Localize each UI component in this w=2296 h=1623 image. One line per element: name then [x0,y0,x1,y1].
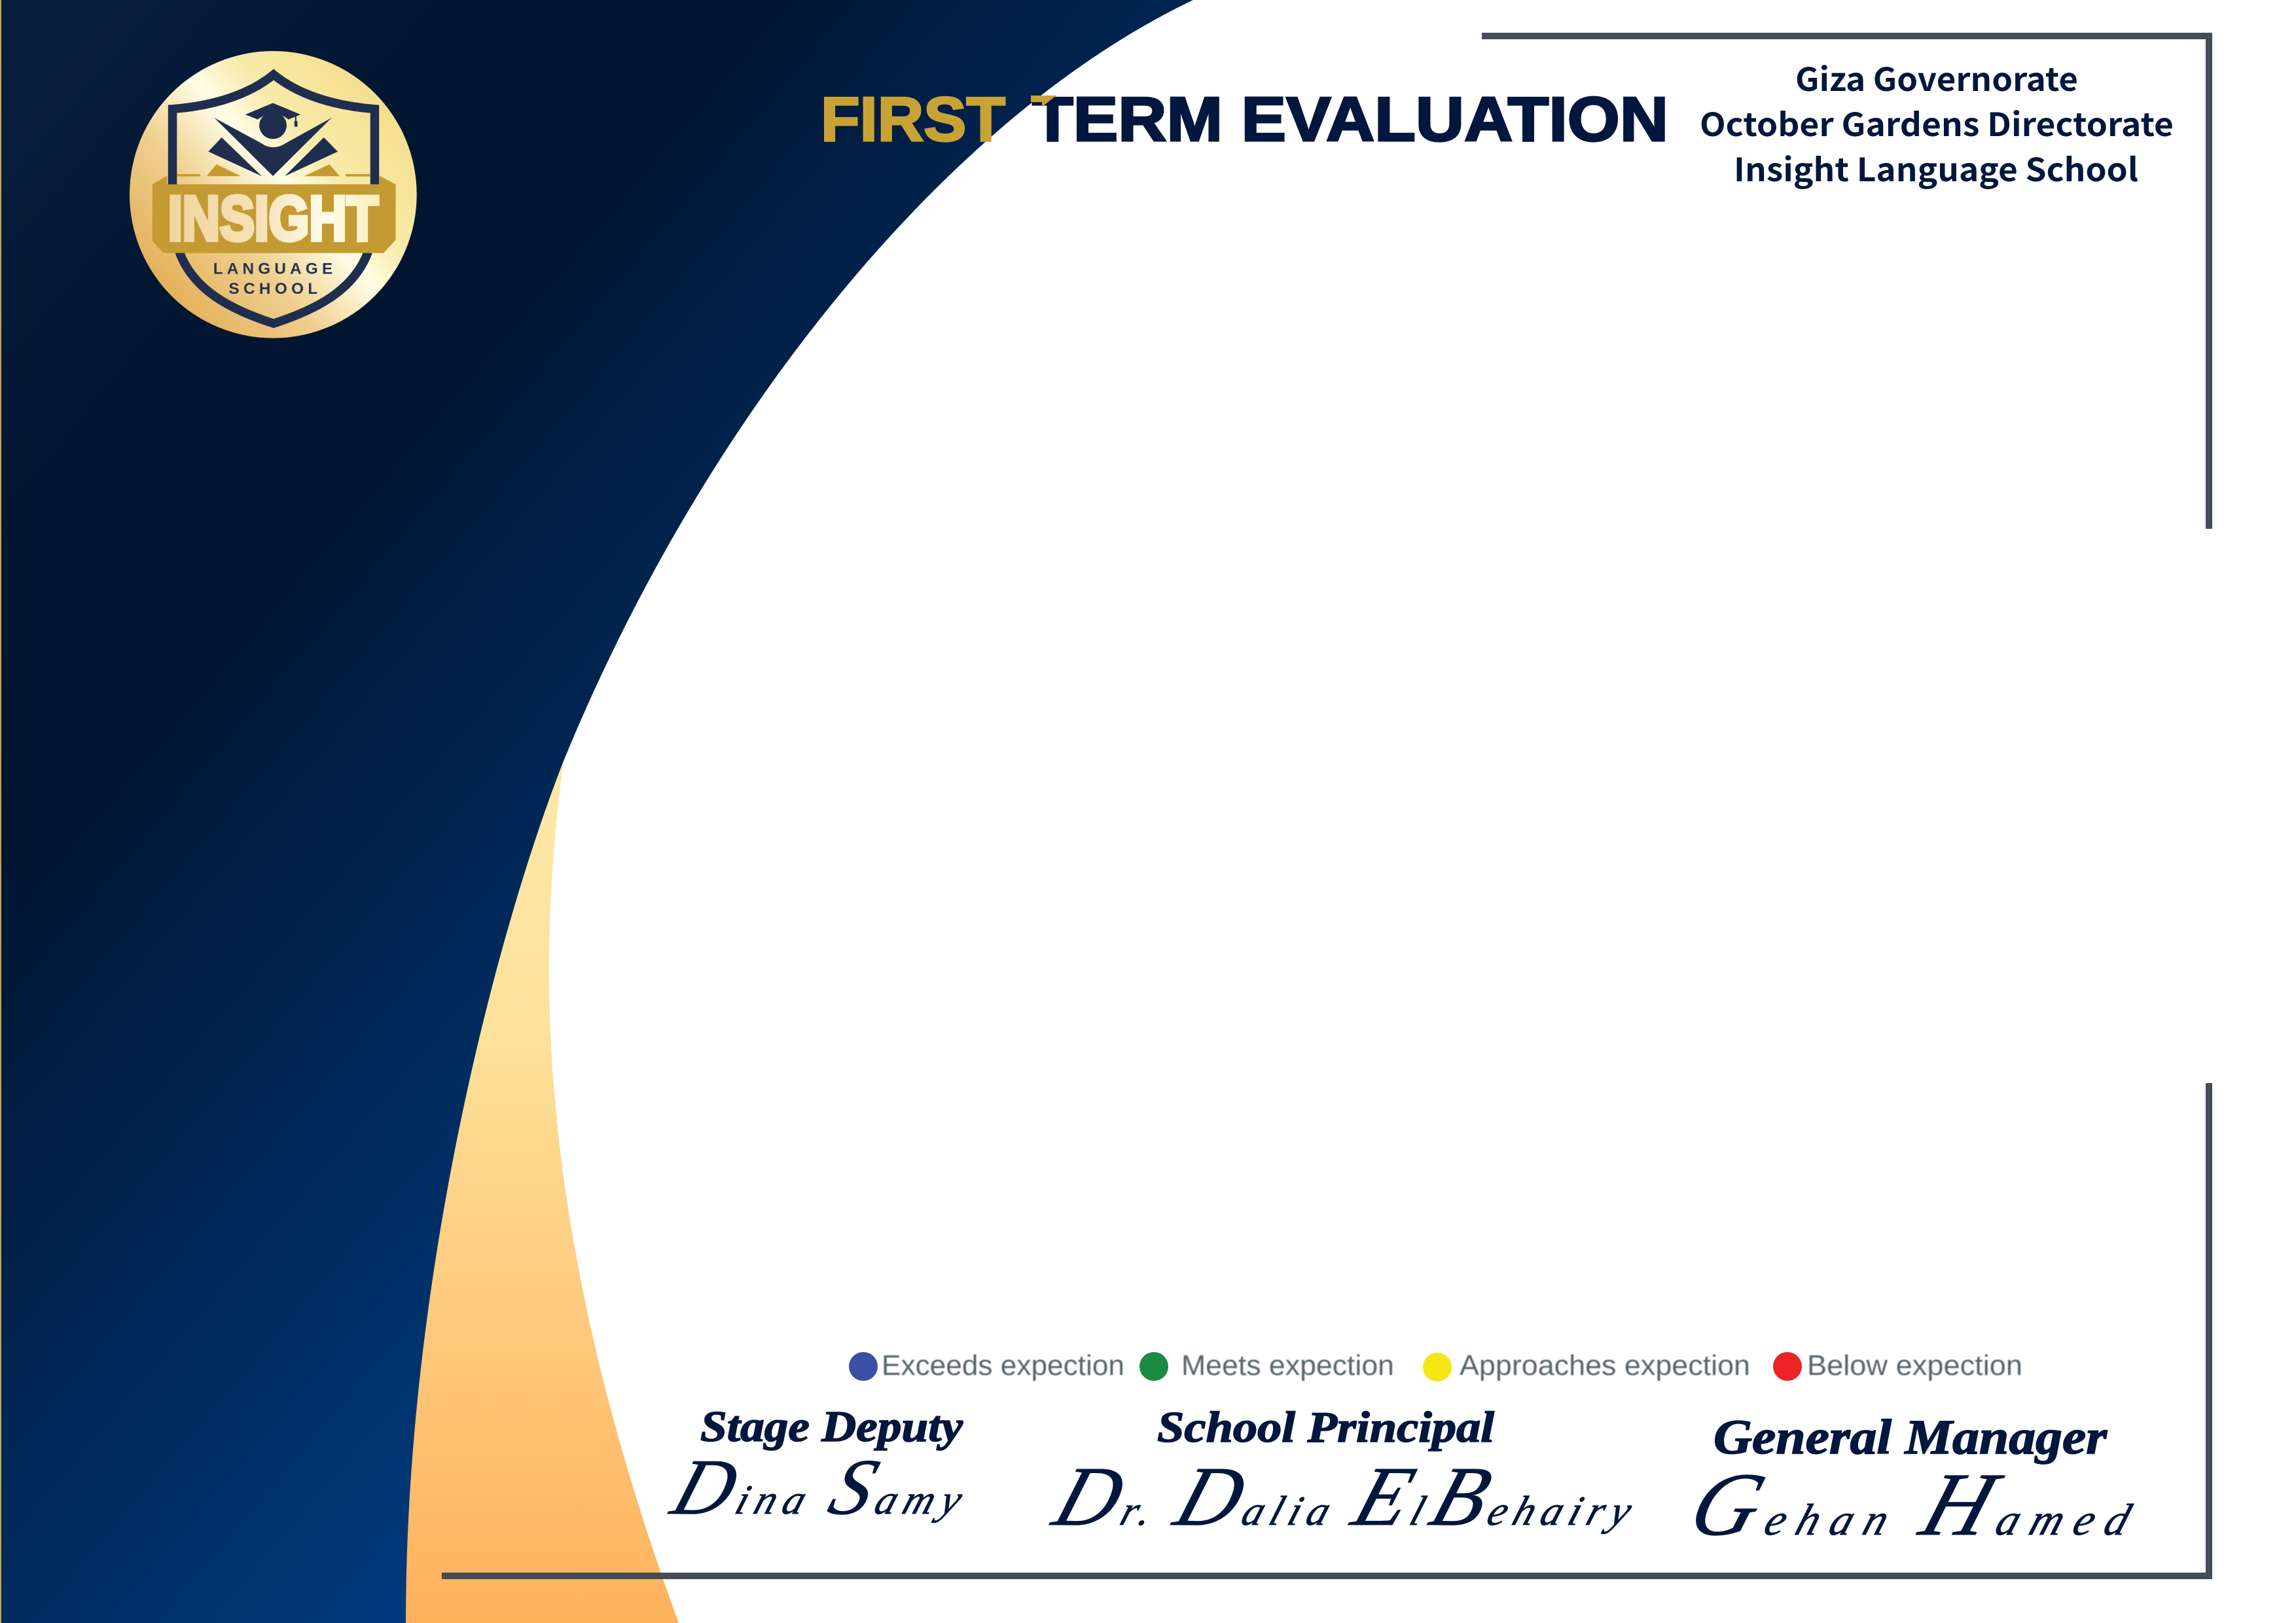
signature block: Stage Deputy: Stage Deputy [700,1402,963,1451]
title: FIRST TERM EVALUATION: TERM EVALUATION [1032,84,1668,154]
logo shield outline [173,75,374,323]
school info text block: Insight Language School [1734,145,2138,191]
signature block: General Manager [1679,1410,2151,1554]
legend item: exceeds expectation: Exceeds expection [882,1349,1124,1382]
signature block: Stage Deputy: Dina Samy [661,1443,980,1531]
school info text block: Giza Governorate [1795,54,2078,101]
school info text block [1700,54,2174,191]
logo ribbon band [152,175,396,253]
signature block: General Manager: General Manager [1713,1410,2108,1465]
legend item: meets expectation: Meets expection [1181,1349,1394,1382]
navy curved panel [0,0,1193,1623]
thin gold left edge [0,0,1,1623]
title: FIRST TERM EVALUATION: FIRST [821,84,1005,154]
signature block: School Principal: School Principal [1157,1403,1494,1452]
signature block: General Manager: Gehan Hamed [1679,1454,2151,1554]
logo wordmark INSIGHT: INSIGHT [168,183,378,253]
signature block: School Principal: Dr. Dalia ElBehairy [1043,1449,1651,1543]
legend item: below expectation: Below expection [1807,1349,2022,1382]
signature block: Stage Deputy [661,1402,980,1531]
gold curved band [393,761,679,1623]
logo graduate figure with cap [208,103,338,176]
page frame: top right bracket [1482,33,2212,529]
legend: performance levels [849,1349,2022,1382]
logo: Insight Language School badge [130,51,417,338]
logo gold disc [130,51,417,338]
legend item: approaches expectation: Approaches expection [1460,1349,1750,1382]
logo text SCHOOL: SCHOOL [228,280,318,298]
logo gold book shapes [177,164,370,177]
logo text LANGUAGE: LANGUAGE [213,260,332,277]
signature block: School Principal [1043,1403,1651,1543]
school info text block: October Gardens Directorate [1700,99,2174,146]
page frame: bottom right bracket [442,1083,2212,1579]
